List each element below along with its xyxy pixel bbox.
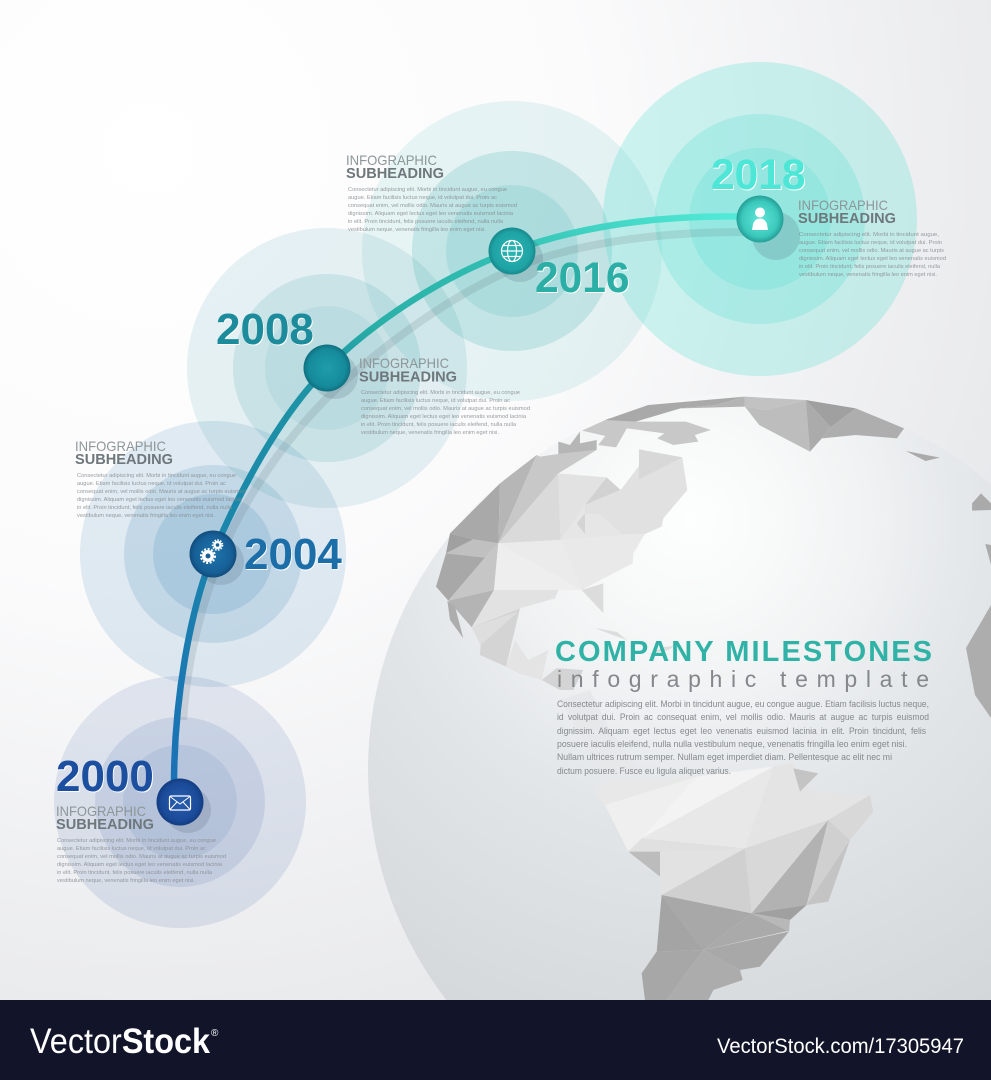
rings: 2016 xyxy=(362,101,662,401)
body text: consequat enim, vel mollis odio. Mauris at augue ac turpis xyxy=(799,248,944,254)
year: 2000 xyxy=(57,753,155,802)
subheading: SUBHEADING xyxy=(359,368,457,386)
intro paragraph: id volutpat dui. Proin ac consequat enim, vel mollis odio. Mauris at augue ac turpis euismod xyxy=(557,711,929,722)
year: 2008 xyxy=(217,306,315,355)
body text: Consectetur adipiscing elit. Morbi in tincidunt augue, xyxy=(799,232,939,238)
body text: dignissim. Aliquam eget lectus eget leo venenatis euismod lacinia xyxy=(77,497,243,503)
body text: vestibulum neque, venenatis fringilla leo enim eget nisi. xyxy=(77,513,215,519)
node with envelope icon xyxy=(156,778,211,833)
body text: vestibulum neque, venenatis fringilla leo enim eget nisi. xyxy=(799,272,937,278)
body text xyxy=(799,232,946,278)
body text: Consectetur adipiscing elit. Morbi in tincidunt augue, eu congue xyxy=(57,838,216,844)
body text: vestibulum neque, venenatis fringilla leo enim eget nisi. xyxy=(57,878,195,884)
intro paragraph xyxy=(557,698,929,776)
body text: augue. Etiam facilisis luctus neque, id volutpat dui. Proin ac xyxy=(77,481,226,487)
body text: consequat enim, vel mollis odio. Mauris at augue ac turpis euismod xyxy=(361,406,530,412)
body text: vestibulum neque, venenatis fringilla leo enim eget nisi. xyxy=(361,430,499,436)
body text: in elit. Proin tincidunt, felis posuere iaculis eleifend, nulla nulla xyxy=(57,870,213,876)
body text xyxy=(77,473,246,519)
body text: vestibulum neque, venenatis fringilla leo enim eget nisi. xyxy=(348,227,486,233)
subheading xyxy=(798,197,896,227)
body text: dignissim. Aliquam eget lectus eget leo venenatis euismod lacinia xyxy=(57,862,223,868)
year: 2018 xyxy=(711,152,806,199)
intro paragraph: dictum posuere. Fusce eu ligula aliquet varius. xyxy=(557,765,731,776)
body text xyxy=(361,390,530,436)
map: South America xyxy=(595,763,873,1000)
body text: consequat enim, vel mollis odio. Mauris at augue ac turpis euismod xyxy=(77,489,246,495)
subheading: INFOGRAPHIC xyxy=(56,803,146,819)
rings: 2008 xyxy=(187,228,467,508)
rings: 2000 xyxy=(54,676,306,928)
rings: 2018 xyxy=(603,62,917,376)
body text: dignissim. Aliquam eget lectus eget leo venenatis euismod xyxy=(799,256,946,262)
milestone 2000 xyxy=(56,752,226,884)
footer bar xyxy=(0,1000,991,1080)
body text xyxy=(57,838,226,884)
body text: consequat enim, vel mollis odio. Mauris at augue ac turpis euismod xyxy=(348,203,517,209)
subheading xyxy=(56,803,154,833)
body text: in elit. Proin tincidunt, felis posuere iaculis eleifend, nulla xyxy=(799,264,941,270)
milestone 2016 xyxy=(346,152,630,303)
body text: Consectetur adipiscing elit. Morbi in tincidunt augue, eu congue xyxy=(77,473,236,479)
subtitle: infographic template xyxy=(557,666,929,692)
map: Arctic and Greenland xyxy=(582,397,991,565)
subheading xyxy=(75,438,173,468)
year: 2016 xyxy=(536,256,630,303)
year: 2008 xyxy=(216,305,314,354)
subheading: SUBHEADING xyxy=(75,451,173,468)
map: Africa edge xyxy=(966,605,991,718)
year: 2018 xyxy=(712,153,806,200)
year: 2004 xyxy=(245,531,343,580)
globe xyxy=(368,393,991,1000)
body text xyxy=(348,187,517,233)
node with globe icon xyxy=(488,228,543,282)
body text: augue. Etiam facilisis luctus neque, id volutpat dui. Proin ac xyxy=(348,195,497,201)
rings: 2004 xyxy=(80,421,346,687)
map: Central America and islands xyxy=(560,628,675,770)
milestone 2008 xyxy=(216,305,530,436)
subheading: INFOGRAPHIC xyxy=(798,197,888,213)
subheading: SUBHEADING xyxy=(56,816,154,833)
body text: augue. Etiam facilisis luctus neque, id volutpat dui. Proin xyxy=(799,240,942,246)
body text: Consectetur adipiscing elit. Morbi in tincidunt augue, eu congue xyxy=(361,390,520,396)
body text: in elit. Proin tincidunt, felis posuere iaculis eleifend, nulla nulla xyxy=(361,422,517,428)
map: North America xyxy=(436,432,687,690)
VectorStock logo: VectorStock xyxy=(30,1022,210,1061)
subheading: INFOGRAPHIC xyxy=(359,355,449,371)
year: 2016 xyxy=(535,255,630,302)
milestone 2004 xyxy=(75,438,343,585)
node with gears icon xyxy=(190,530,244,585)
subheading xyxy=(346,152,444,182)
subheading xyxy=(359,355,457,386)
body text: dignissim. Aliquam eget lectus eget leo venenatis euismod lacinia xyxy=(348,211,514,217)
subheading: INFOGRAPHIC xyxy=(75,438,166,454)
milestone 2018 xyxy=(711,152,946,278)
body text: augue. Etiam facilisis luctus neque, id volutpat dui. Proin ac xyxy=(57,846,206,852)
body text: augue. Etiam facilisis luctus neque, id volutpat dui. Proin ac xyxy=(361,398,510,404)
title: COMPANY MILESTONES xyxy=(555,636,932,668)
node xyxy=(304,344,358,399)
intro paragraph: Nullam ultrices rutrum semper. Nullam eget imperdiet diam. Pellentesque ac elit nec mi xyxy=(557,751,892,762)
subheading: INFOGRAPHIC xyxy=(346,152,437,168)
body text: in elit. Proin tincidunt, felis posuere iaculis eleifend, nulla nulla xyxy=(77,505,233,511)
registered mark: ® xyxy=(211,1028,219,1039)
intro paragraph: dignissim. Aliquam eget lectus eget leo venenatis euismod lacinia in elit. Proin tincidunt, felis xyxy=(557,725,926,736)
body text: Consectetur adipiscing elit. Morbi in tincidunt augue, eu congue xyxy=(348,187,507,193)
timeline arc shadow xyxy=(183,232,745,720)
year: 2004 xyxy=(244,530,342,579)
node with person icon xyxy=(736,196,800,260)
year: 2000 xyxy=(56,752,154,801)
body text: in elit. Proin tincidunt, felis posuere iaculis eleifend, nulla nulla xyxy=(348,219,504,225)
body text: consequat enim, vel mollis odio. Mauris at augue ac turpis euismod xyxy=(57,854,226,860)
intro paragraph: posuere iaculis eleifend, nulla nulla vestibulum neque, venenatis fringilla leo enim eget nisi. xyxy=(557,738,907,749)
subheading: SUBHEADING xyxy=(346,165,444,182)
subheading: SUBHEADING xyxy=(798,210,896,227)
intro paragraph: Consectetur adipiscing elit. Morbi in tincidunt augue, eu congue augue. Etiam facilisis luctus neque, xyxy=(557,698,929,709)
body text: dignissim. Aliquam eget lectus eget leo venenatis euismod lacinia xyxy=(361,414,527,420)
timeline arc xyxy=(174,216,760,785)
image id: VectorStock.com/17305947 xyxy=(717,1035,964,1058)
